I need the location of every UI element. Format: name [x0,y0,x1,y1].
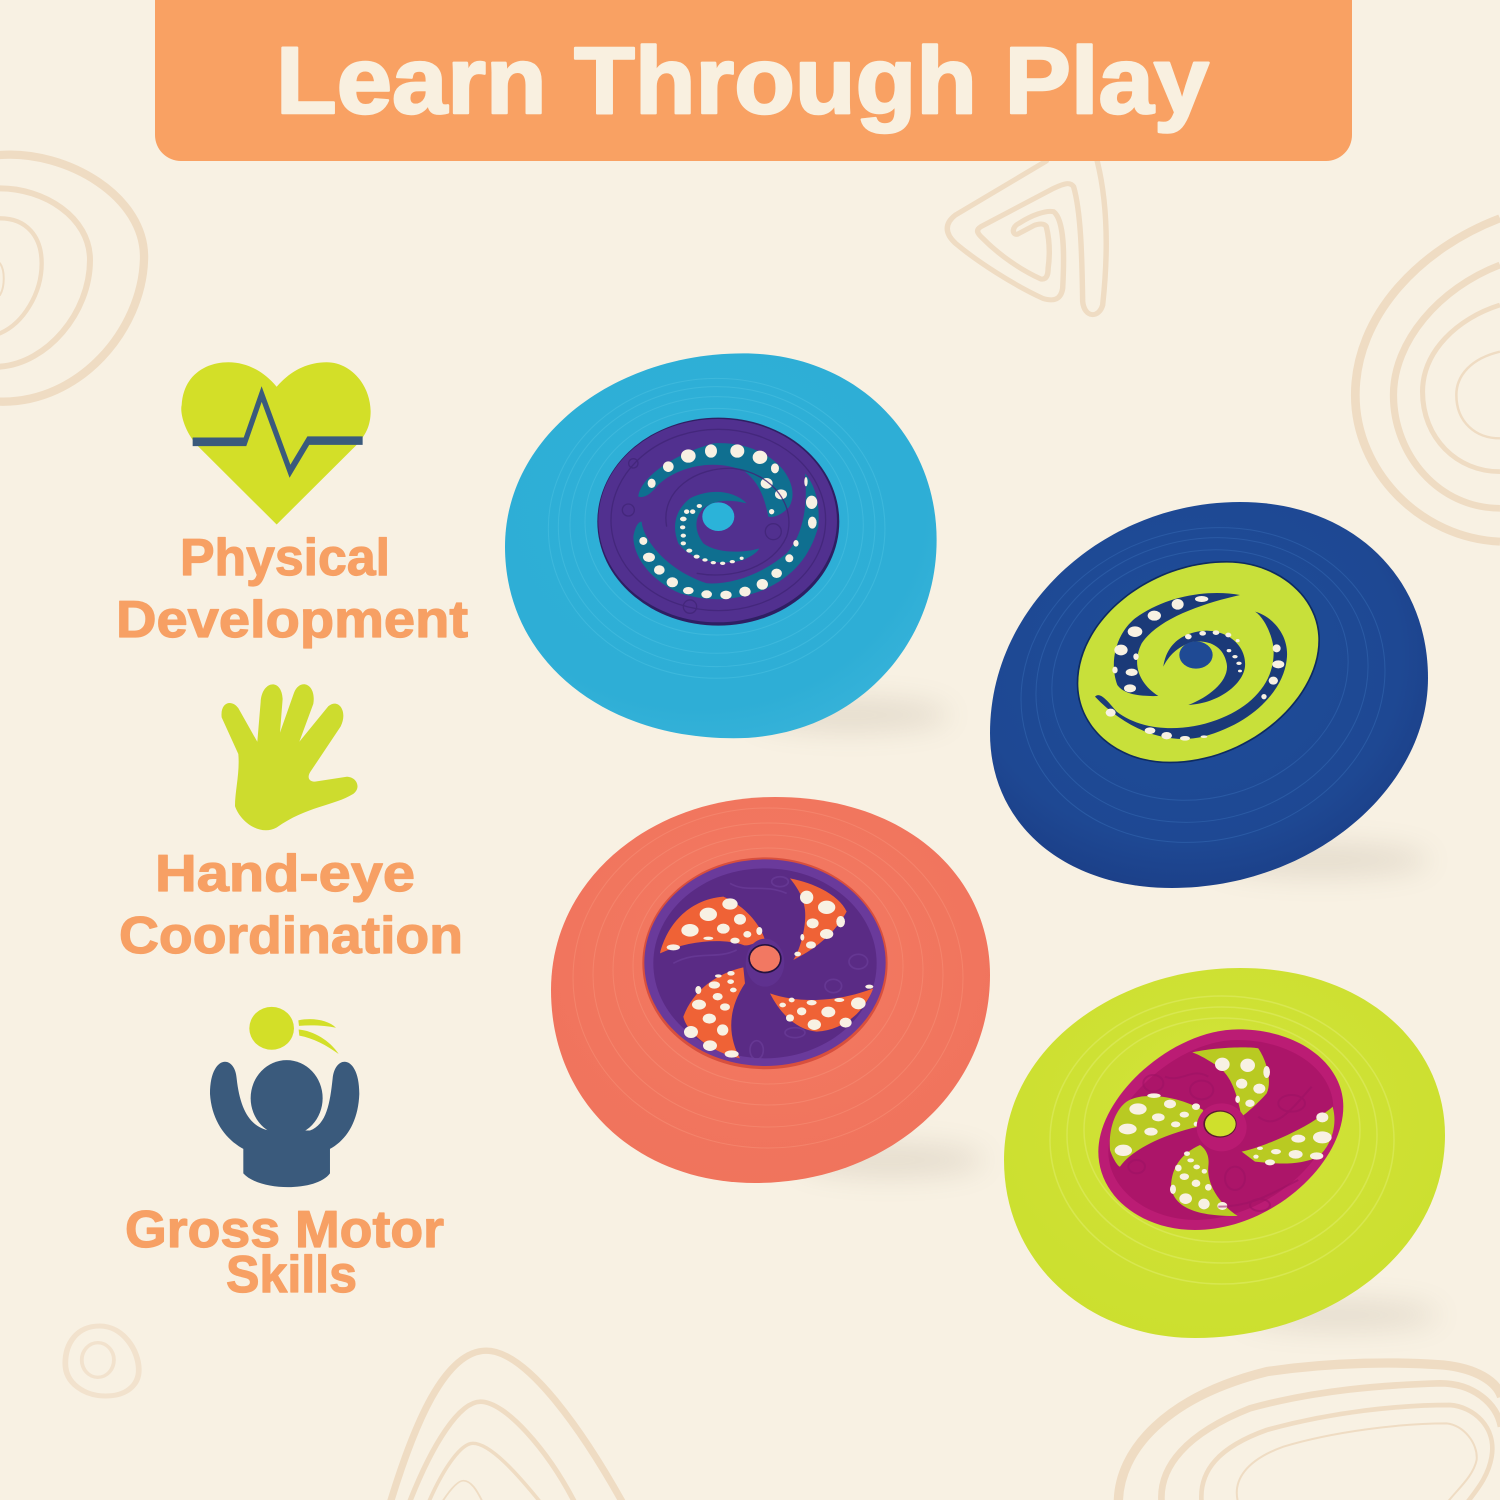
title banner [155,0,1352,161]
title: Learn Through Play [276,28,1209,134]
icon: hand [221,684,358,830]
label: Gross Motor Skills: Gross Motor [125,1201,444,1259]
background pattern: right rings [1355,218,1500,542]
soft shadows under discs [750,699,1440,1329]
background pattern: top spiral triangle [947,161,1106,315]
frisbee: turquoise with purple spiral [505,353,937,738]
frisbee: navy with lime spiral [983,485,1428,888]
pinwheel hub [1098,1029,1343,1230]
background pattern: bottom triangle arcs [391,1351,622,1500]
background pattern: bottom right rings [1118,1363,1500,1500]
label: Physical Development: Development [116,591,468,649]
label: Gross Motor Skills [125,1201,444,1304]
label: Hand-eye Coordination: Coordination [119,907,463,965]
label: Hand-eye Coordination: Hand-eye [155,845,415,903]
background pattern: small egg rings [65,1326,139,1396]
icon: heart with pulse line [181,362,371,524]
label: Gross Motor Skills: Skills [226,1246,357,1304]
frisbee: lime with magenta pinwheel [1004,968,1445,1338]
pinwheel hub [642,857,888,1069]
spiral hub [597,418,839,626]
background pattern: left rings [0,155,144,402]
label: Hand-eye Coordination [119,845,463,965]
icon: child catching ball [210,1007,359,1187]
spiral hub [1078,563,1318,762]
label: Physical Development: Physical [180,529,390,587]
frisbee: coral with purple pinwheel [551,797,990,1183]
label: Physical Development [116,529,468,649]
